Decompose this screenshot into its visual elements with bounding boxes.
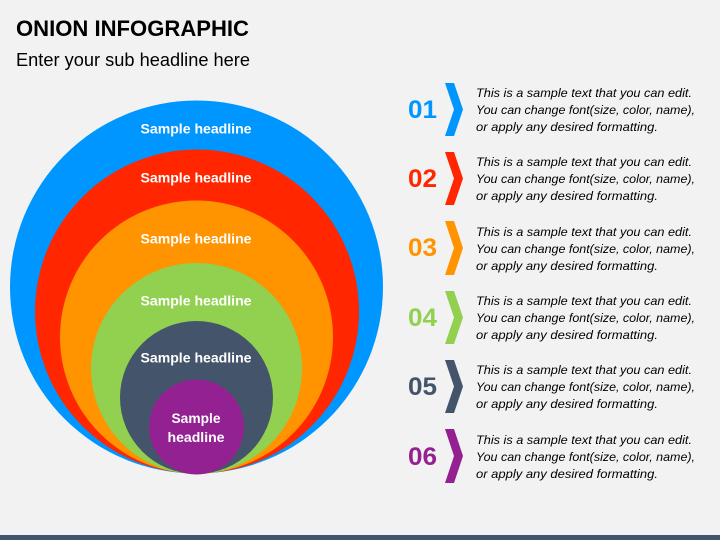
footer bar (0, 535, 720, 540)
text 04: This is a sample text that you can edit. (476, 295, 692, 308)
layer 1: blue: Sample headline (140, 120, 252, 136)
text 01: or apply any desired formatting. (476, 121, 658, 134)
layer 3: orange: Sample headline (140, 230, 252, 246)
chevron 05 (445, 360, 463, 413)
chevron 02 (445, 152, 463, 205)
title: ONION INFOGRAPHIC (16, 16, 249, 41)
text 06: or apply any desired formatting. (476, 468, 658, 481)
layer 2: red: Sample headline (140, 170, 252, 186)
layer 6: purple core: Sample (172, 410, 221, 426)
text 02: or apply any desired formatting. (476, 190, 658, 203)
list item 04 (408, 291, 695, 344)
layer 6: purple core (149, 380, 244, 474)
layer 3: orange (60, 200, 333, 474)
number 05: 05 (408, 373, 437, 401)
layer 6: purple core: headline (168, 429, 225, 445)
number 04: 04 (408, 304, 437, 332)
layer 2: red (35, 150, 359, 474)
chevron 03 (445, 221, 463, 275)
list item 03 (408, 221, 695, 275)
number 03: 03 (408, 234, 437, 262)
chevron 04 (445, 291, 463, 344)
list item 02 (408, 152, 695, 205)
text 05: You can change font(size, color, name), (476, 381, 695, 394)
chevron 06 (445, 429, 463, 483)
list item 06 (408, 429, 695, 483)
text 03: This is a sample text that you can edit. (476, 226, 692, 239)
layer 5: slate: Sample headline (140, 350, 252, 366)
text 02: This is a sample text that you can edit. (476, 156, 692, 169)
text 06: You can change font(size, color, name), (476, 451, 695, 464)
text 01: This is a sample text that you can edit. (476, 87, 692, 100)
list item 01 (408, 83, 695, 136)
text 05: This is a sample text that you can edit. (476, 364, 692, 377)
number 02: 02 (408, 165, 437, 193)
layer 4: green (91, 263, 302, 474)
layer 4: green: Sample headline (140, 292, 252, 308)
text 01: You can change font(size, color, name), (476, 104, 695, 117)
text 02: You can change font(size, color, name), (476, 173, 695, 186)
onion diagram (10, 100, 383, 474)
text 03: You can change font(size, color, name), (476, 243, 695, 256)
number 06: 06 (408, 443, 437, 471)
chevron 01 (445, 83, 463, 136)
text 04: You can change font(size, color, name), (476, 312, 695, 325)
text 03: or apply any desired formatting. (476, 260, 658, 273)
subtitle: Enter your sub headline here (16, 50, 250, 70)
list item 05 (408, 360, 695, 413)
text 05: or apply any desired formatting. (476, 398, 658, 411)
text 04: or apply any desired formatting. (476, 329, 658, 342)
number 01: 01 (408, 96, 437, 124)
text 06: This is a sample text that you can edit. (476, 434, 692, 447)
layer 5: slate (120, 321, 273, 474)
